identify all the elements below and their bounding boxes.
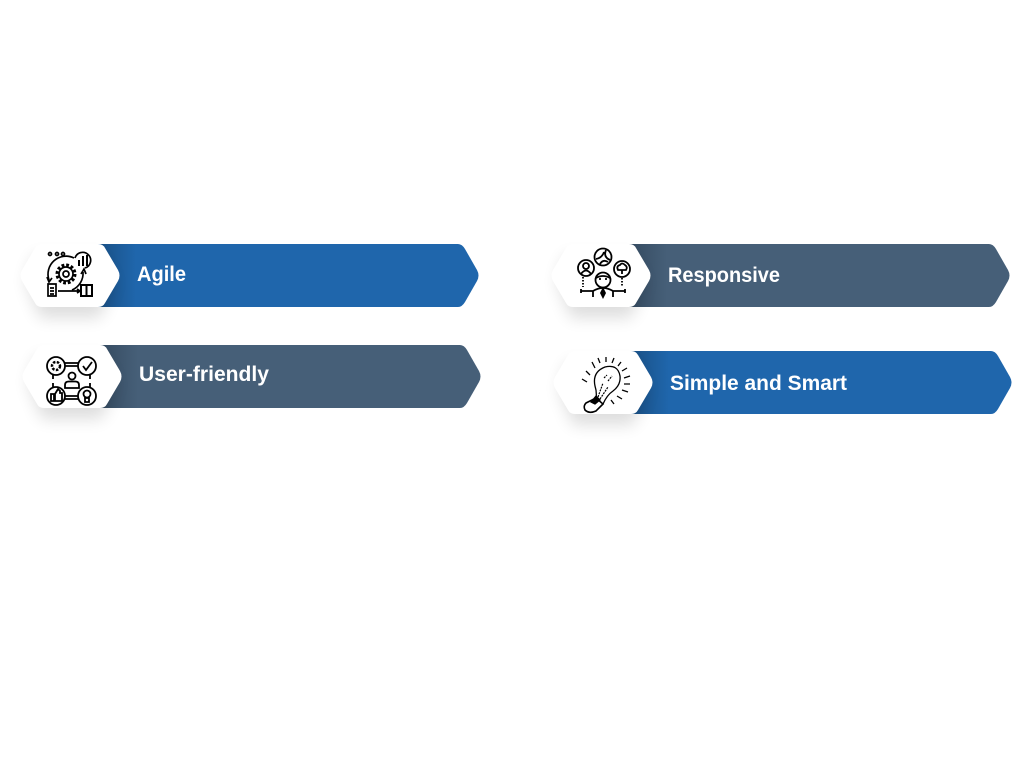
- banner: Simple and Smart: [554, 351, 1012, 425]
- white hexagon: [20, 244, 120, 307]
- label: User-friendly: User-friendly: [139, 363, 269, 386]
- banner: Agile: [20, 244, 478, 318]
- bar shade: [631, 244, 667, 307]
- blue bar: [611, 351, 1012, 414]
- hexagon shadow: [28, 357, 116, 419]
- icon: user network: [47, 357, 96, 405]
- white hexagon: [22, 345, 122, 408]
- bar shade: [100, 244, 136, 307]
- hexagon shadow: [26, 256, 114, 318]
- white hexagon: [554, 351, 652, 414]
- blue bar: [78, 244, 478, 307]
- label: Responsive: Responsive: [668, 264, 780, 287]
- icon: light bulb: [582, 357, 630, 412]
- bar shade: [633, 351, 669, 414]
- icon: gear workflow: [47, 252, 92, 296]
- white hexagon: [552, 244, 650, 307]
- slate bar: [609, 244, 1010, 307]
- hexagon shadow: [557, 256, 645, 318]
- icon: person with ideas: [578, 248, 630, 297]
- banner: User-friendly: [22, 345, 480, 419]
- slate bar: [80, 345, 480, 408]
- bar shade: [102, 345, 138, 408]
- label: Agile: Agile: [137, 263, 186, 286]
- label: Simple and Smart: Simple and Smart: [670, 372, 847, 395]
- hexagon shadow: [559, 363, 647, 425]
- banner: Responsive: [552, 244, 1010, 318]
